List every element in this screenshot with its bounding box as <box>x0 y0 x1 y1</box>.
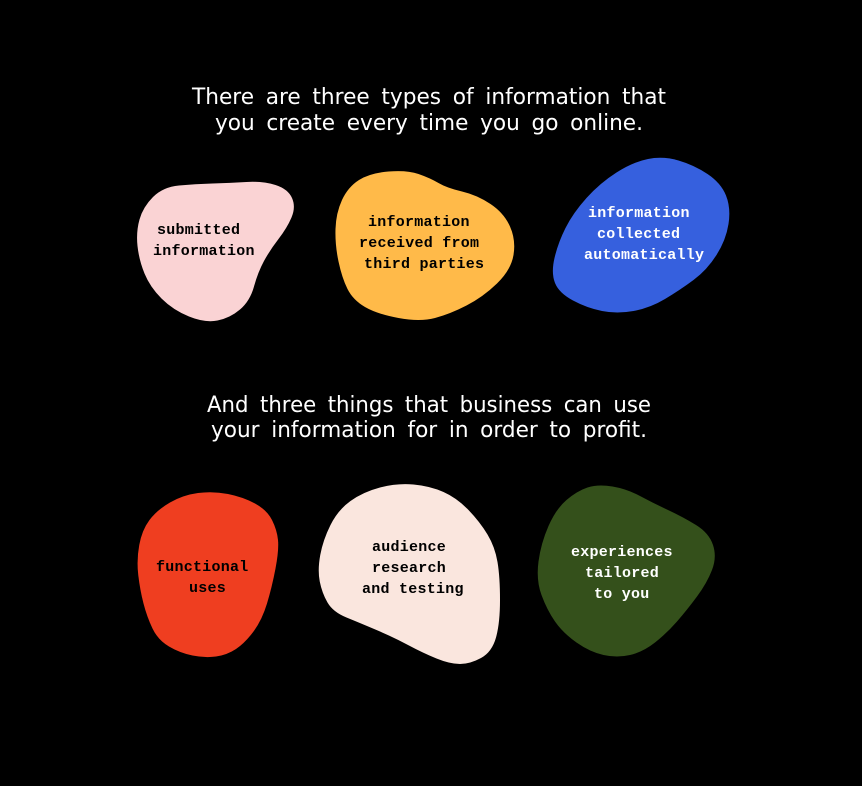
heading: three things <box>207 392 651 443</box>
blob: submitted information: information <box>153 243 255 260</box>
blob: functional uses: functional <box>156 559 249 576</box>
blob: experiences tailored to you <box>538 485 715 656</box>
blob: information collected automatically: automatically <box>584 247 704 264</box>
blob: information received from third parties: received from <box>359 235 479 252</box>
blob: information received from third parties: third parties <box>364 256 484 273</box>
blob: audience research and testing: research <box>372 560 446 577</box>
blob: information collected automatically: collected <box>597 226 680 243</box>
blob: information received from third parties: information <box>368 214 470 231</box>
blob: experiences tailored to you: tailored <box>585 565 659 582</box>
blob: audience research and testing <box>319 484 500 664</box>
blob: audience research and testing: and testing <box>362 581 464 598</box>
blob: submitted information <box>137 182 294 321</box>
blob: information received from third parties <box>335 171 514 320</box>
heading: three types: you create every time you go online. <box>215 110 643 136</box>
heading: three things: And three things that business can use <box>207 392 651 418</box>
blob: audience research and testing: audience <box>372 539 446 556</box>
blob: information collected automatically <box>553 158 729 312</box>
blob: submitted information: submitted <box>157 222 240 239</box>
blob: experiences tailored to you: experiences <box>571 544 673 561</box>
blob: functional uses <box>138 492 278 657</box>
blob: information collected automatically: information <box>588 205 690 222</box>
heading: three types <box>191 84 666 136</box>
heading: three types: There are three types of information that <box>191 84 666 110</box>
heading: three things: your information for in order to profit. <box>211 417 647 443</box>
blob: functional uses: uses <box>189 580 226 597</box>
blob: experiences tailored to you: to you <box>594 586 650 603</box>
